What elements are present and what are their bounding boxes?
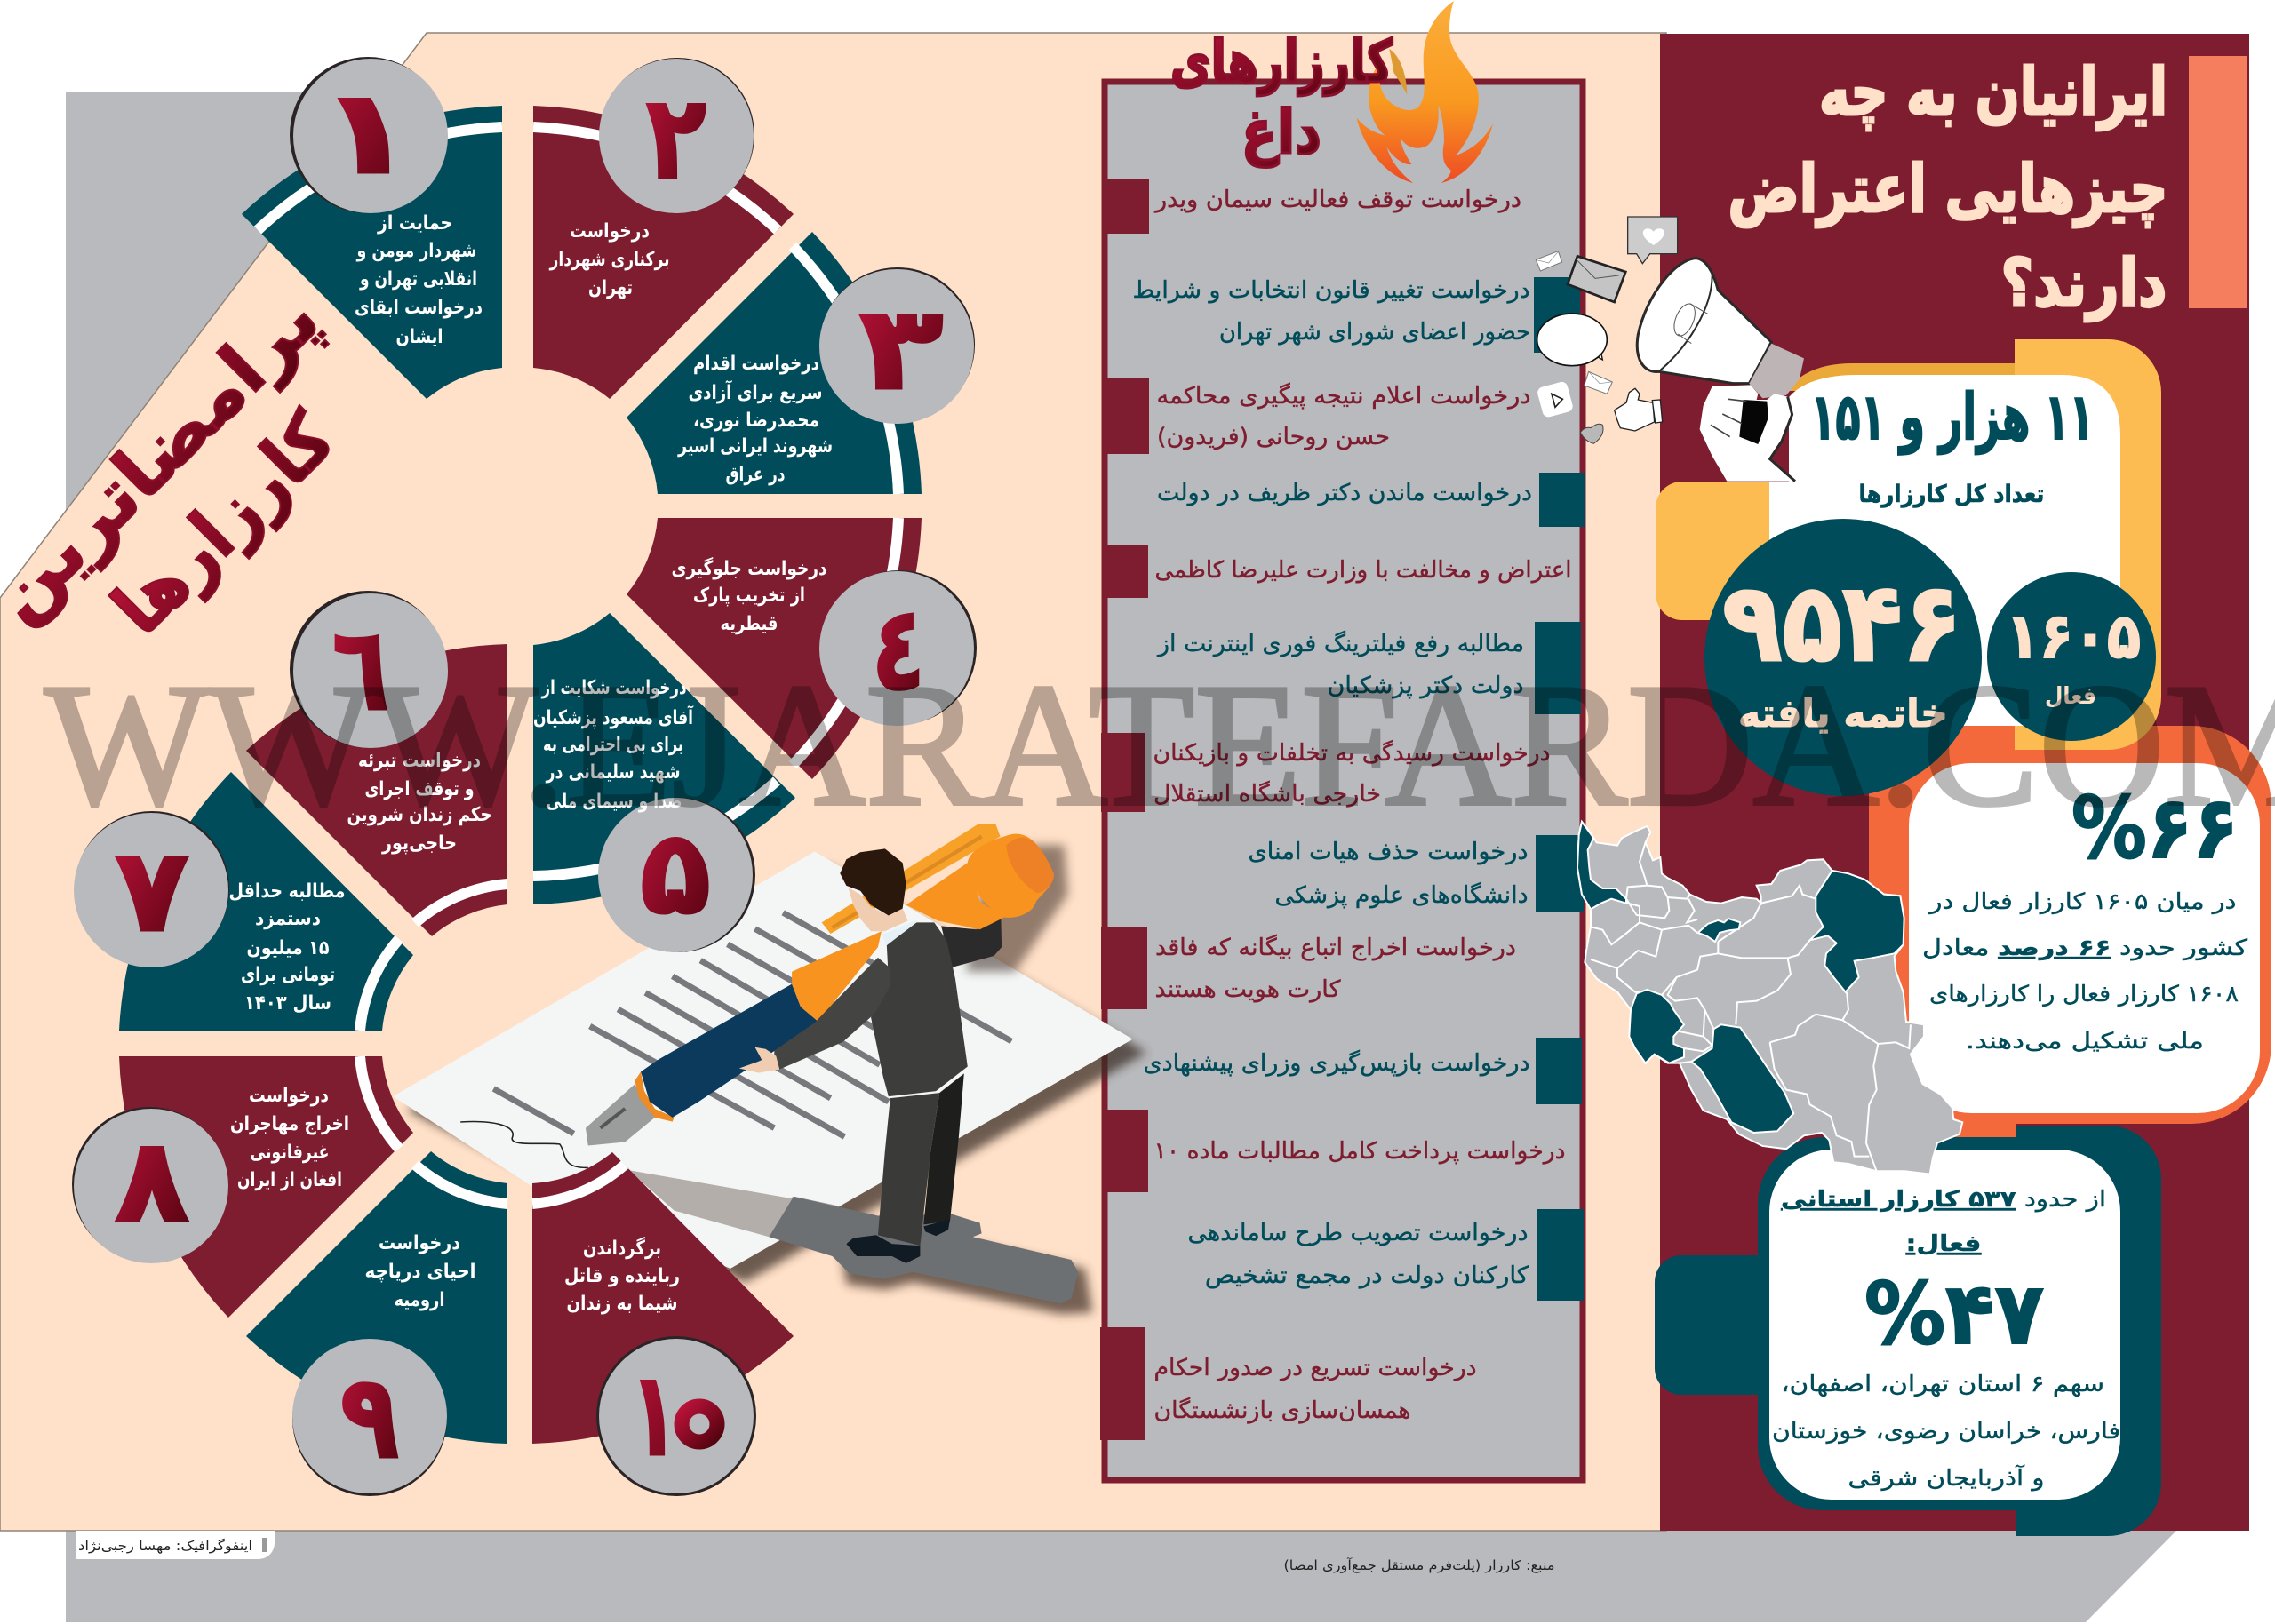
list item 9: درخواست اخراج اتباع بیگانه که فاقد bbox=[1155, 934, 1516, 961]
list item 11: درخواست پرداخت کامل مطالبات ماده ۱۰ bbox=[1153, 1138, 1566, 1165]
sector 9 bbox=[246, 1151, 507, 1444]
text 6 bbox=[347, 750, 492, 855]
list item 6 bbox=[1156, 622, 1581, 714]
badge 5 bbox=[598, 798, 755, 952]
text 4: قیطریه bbox=[720, 613, 778, 635]
text 10: برگرداندن bbox=[583, 1236, 661, 1260]
badge 7: ۷ bbox=[115, 823, 189, 958]
text 3: درخواست اقدام bbox=[693, 353, 819, 375]
icons: megaphone and social messages bbox=[1536, 217, 1804, 482]
list item 6: دولت دکتر پزشکیان bbox=[1328, 673, 1523, 699]
badge 9: ۹ bbox=[340, 1349, 399, 1485]
list item 12 bbox=[1187, 1209, 1584, 1301]
stat: total label: تعداد کل کارزارها bbox=[1859, 481, 2044, 508]
list item 10: درخواست بازپس‌گیری وزرای پیشنهادی bbox=[1143, 1049, 1530, 1077]
chart: upper campaigns wheel bbox=[242, 106, 922, 904]
icon: small heart bbox=[1580, 424, 1603, 443]
badge 2 bbox=[599, 58, 754, 213]
list item 9: کارت هویت هستند bbox=[1155, 976, 1341, 1003]
callout heading bbox=[1781, 1186, 2106, 1256]
badge 8 bbox=[72, 1107, 228, 1263]
list item 12: درخواست تصویب طرح ساماندهی bbox=[1187, 1220, 1529, 1246]
icon: thumbs up bbox=[1615, 388, 1663, 431]
text 8: اخراج مهاجران bbox=[230, 1113, 349, 1135]
panel: 66 percent block background bbox=[1869, 726, 2271, 1150]
text 2: برکناری شهردار bbox=[549, 249, 670, 271]
text 10: رباینده و قاتل bbox=[564, 1265, 680, 1287]
sector 10 bbox=[532, 1152, 794, 1444]
credit: designer label: اینفوگرافیک: مهسا رجبی‌نژاد bbox=[78, 1538, 252, 1554]
list item 2 bbox=[1132, 277, 1580, 353]
list item 11 bbox=[1102, 1110, 1566, 1192]
text 9: احیای دریاچه bbox=[364, 1261, 476, 1283]
badge 6: ٦ bbox=[332, 601, 389, 736]
text 1 bbox=[355, 212, 483, 348]
list item 5: اعتراض و مخالفت با وزارت علیرضا کاظمی bbox=[1155, 557, 1571, 584]
province: Khuzestan bbox=[1629, 990, 1684, 1063]
province: West Azerbaijan bbox=[1577, 822, 1626, 909]
text 3: سریع برای آزادی bbox=[688, 379, 823, 404]
callout text: در میان ۱۶۰۵ کارزار فعال در bbox=[1928, 888, 2236, 914]
text 4: از تخریب پارک bbox=[693, 585, 805, 607]
icon: play button bbox=[1537, 380, 1574, 418]
panel: hot campaigns list bbox=[1100, 82, 1585, 1480]
text 5: آقای مسعود پزشکیان bbox=[533, 705, 693, 729]
stat: active campaigns circle: فعال bbox=[2045, 683, 2096, 710]
sector 3 bbox=[627, 232, 922, 494]
number badges bbox=[72, 57, 977, 1496]
sector 6 bbox=[246, 644, 507, 936]
text 2 bbox=[549, 220, 670, 299]
sector 5 bbox=[533, 613, 795, 904]
badge 4: ٤ bbox=[872, 581, 925, 716]
stat: closed campaigns circle bbox=[1704, 519, 1982, 796]
chart: lower campaigns wheel bbox=[119, 644, 794, 1444]
text 8 bbox=[230, 1085, 349, 1191]
badge 2: ۲ bbox=[646, 70, 706, 205]
badge 10 bbox=[596, 1336, 756, 1496]
badge 10: ۱۰ bbox=[630, 1347, 726, 1482]
panel: dark red right column bbox=[1660, 34, 2249, 1531]
list item 12: کارکنان دولت در مجمع تشخیص bbox=[1205, 1262, 1529, 1289]
stat: active campaigns circle bbox=[1987, 572, 2156, 741]
sector 8 bbox=[119, 1056, 413, 1318]
list item 7 bbox=[1101, 733, 1550, 812]
icon: flame bbox=[1357, 1, 1493, 183]
sector 1 bbox=[242, 106, 502, 399]
text 9: درخواست bbox=[379, 1232, 460, 1254]
icon: small envelope bbox=[1536, 251, 1562, 271]
list item 4 bbox=[1157, 473, 1585, 527]
text 6: حاجی‌پور bbox=[381, 832, 457, 855]
badge 5: ۵ bbox=[640, 805, 711, 940]
callout text: فارس، خراسان رضوی، خوزستان bbox=[1772, 1418, 2120, 1444]
text 7: ۱۵ میلیون bbox=[247, 937, 329, 959]
text 5 bbox=[533, 677, 693, 813]
sector 2 bbox=[533, 106, 794, 399]
list item 13: درخواست تسریع در صدور احکام bbox=[1153, 1355, 1477, 1381]
sector 4 bbox=[627, 518, 922, 779]
text 8: درخواست bbox=[249, 1085, 329, 1107]
text 7: دستمزد bbox=[255, 908, 321, 930]
badge 9 bbox=[292, 1339, 447, 1496]
text 5: برای بی احترامی به bbox=[543, 734, 683, 756]
credit: source: منبع: کارزار (پلت‌فرم مستقل جمع‌آوری امضا) bbox=[1283, 1557, 1555, 1574]
list item 10 bbox=[1143, 1038, 1582, 1104]
text 6: درخواست تبرئه bbox=[358, 750, 481, 772]
panel: 47 percent callout bbox=[1655, 1126, 2161, 1536]
heading: hot campaigns: داغ bbox=[1241, 98, 1321, 168]
text 6: حکم زندان شروین bbox=[347, 804, 492, 826]
callout text: ملی تشکیل می‌دهند. bbox=[1966, 1028, 2204, 1054]
text 5: شهید سلیمانی در bbox=[546, 761, 681, 784]
badge 3: ۳ bbox=[858, 281, 944, 416]
callout text: سهم ۶ استان تهران، اصفهان، bbox=[1781, 1371, 2104, 1397]
list item 6: مطالبه رفع فیلترینگ فوری اینترنت از bbox=[1156, 630, 1524, 657]
illustration: man and giant pen bbox=[586, 824, 1078, 1303]
title bbox=[1728, 54, 2168, 322]
list item 2: حضور اعضای شورای شهر تهران bbox=[1219, 319, 1530, 346]
panel: 66 percent callout bbox=[1909, 763, 2260, 1113]
heading: most signed campaigns: کارزارها bbox=[97, 397, 351, 651]
list item 9 bbox=[1101, 927, 1516, 1009]
panel: title accent bbox=[2189, 56, 2247, 308]
text 5: درخواست شکایت از bbox=[541, 677, 686, 699]
callout heading: از حدود ۵۳۷ کارزار استانی bbox=[1781, 1186, 2106, 1213]
icon: speech bubble bbox=[1537, 314, 1607, 366]
stat: total number: ۱۱ هزار و ۱۵۱ bbox=[1811, 379, 2094, 455]
text 9 bbox=[364, 1232, 476, 1311]
list item 8: درخواست حذف هیات امنای bbox=[1248, 839, 1529, 865]
text 8: افغان از ایران bbox=[237, 1169, 342, 1191]
text 1: ایشان bbox=[396, 326, 443, 348]
text 4: درخواست جلوگیری bbox=[672, 556, 826, 580]
callout text: کشور حدود ۶۶ درصد معادل bbox=[1922, 935, 2247, 961]
sector 7 bbox=[119, 772, 413, 1031]
text 1: حمایت از bbox=[377, 212, 452, 235]
province: Tehran bbox=[1698, 919, 1740, 942]
text 1: درخواست ابقای bbox=[355, 297, 483, 319]
sector texts bbox=[229, 212, 833, 1315]
text 7: تومانی برای bbox=[241, 964, 335, 986]
icon: tiny envelope bbox=[1585, 371, 1612, 394]
province: Fars bbox=[1691, 1024, 1793, 1133]
list item 8 bbox=[1248, 835, 1584, 912]
text 1: شهردار مومن و bbox=[356, 240, 476, 262]
heading: hot campaigns bbox=[1170, 28, 1393, 168]
badge 1: ۱ bbox=[317, 65, 417, 200]
title: ایرانیان به چه bbox=[1819, 54, 2167, 131]
province: Razavi Khorasan bbox=[1810, 871, 1904, 992]
callout text: و آذربایجان شرقی bbox=[1848, 1464, 2044, 1492]
icon: megaphone bbox=[1637, 259, 1804, 398]
list item 13 bbox=[1100, 1327, 1477, 1440]
text 2: تهران bbox=[588, 277, 633, 299]
text 2: درخواست bbox=[570, 220, 650, 243]
list item 1 bbox=[1102, 179, 1521, 234]
text 3 bbox=[677, 353, 833, 486]
badge 1 bbox=[290, 57, 448, 213]
stat: closed campaigns circle: خاتمه یافته bbox=[1738, 691, 1948, 736]
list item 4: درخواست ماندن دکتر ظریف در دولت bbox=[1157, 480, 1532, 506]
text 7: سال ۱۴۰۳ bbox=[244, 992, 331, 1015]
heading: hot campaigns: کارزارهای bbox=[1170, 28, 1393, 96]
text 3: محمدرضا نوری، bbox=[693, 410, 819, 432]
list item 1: درخواست توقف فعالیت سیمان ویدر bbox=[1153, 187, 1521, 213]
callout text: ۱۶۰۸ کارزار فعال را کارزارهای bbox=[1929, 981, 2239, 1007]
text 7 bbox=[229, 880, 345, 1015]
list item 7: خارجی باشگاه استقلال bbox=[1153, 780, 1381, 808]
list item 2: درخواست تغییر قانون انتخابات و شرایط bbox=[1132, 277, 1530, 304]
background: peach panel bbox=[0, 33, 1666, 1531]
badge 6 bbox=[290, 591, 448, 748]
list item 8: دانشگاه‌های علوم پزشکی bbox=[1274, 881, 1529, 909]
text 3: شهروند ایرانی اسیر bbox=[677, 435, 833, 458]
callout text bbox=[1772, 1371, 2120, 1492]
icon: heart bubble bbox=[1628, 217, 1678, 264]
stat: 47 percent: %۴۷ bbox=[1864, 1264, 2044, 1364]
badge 3 bbox=[819, 267, 975, 424]
icon: large envelope bbox=[1568, 256, 1625, 302]
text 7: مطالبه حداقل bbox=[229, 880, 345, 903]
credit: designer label bbox=[76, 1531, 275, 1559]
stat: active campaigns circle: ۱۶۰۵ bbox=[2006, 600, 2141, 673]
stat: 66 percent: %۶۶ bbox=[2071, 778, 2239, 878]
text 10: شیما به زندان bbox=[567, 1293, 677, 1315]
stat: closed campaigns circle: ۹۵۴۶ bbox=[1722, 560, 1962, 686]
text 8: غیرقانونی bbox=[251, 1142, 329, 1164]
text 9: ارومیه bbox=[395, 1289, 444, 1311]
list item 5 bbox=[1102, 545, 1571, 598]
text 5: صدا و سیمای ملی bbox=[546, 791, 682, 813]
list item 3: حسن روحانی (فریدون) bbox=[1157, 424, 1390, 450]
text 10 bbox=[564, 1236, 680, 1315]
list item 3 bbox=[1106, 378, 1530, 454]
text 3: در عراق bbox=[725, 464, 786, 486]
badge 4 bbox=[819, 570, 977, 726]
watermark: WWW.EJARATEFARDA.COM bbox=[44, 648, 2275, 842]
list item 13: همسان‌سازی بازنشستگان bbox=[1153, 1397, 1411, 1424]
badge 7 bbox=[74, 811, 229, 967]
text 1: انقلابی تهران و bbox=[359, 268, 477, 291]
callout text bbox=[1922, 888, 2247, 1054]
badge 8: ۸ bbox=[115, 1113, 189, 1248]
panel: total campaigns block bbox=[1656, 339, 2161, 750]
text 6: و توقف اجرای bbox=[364, 778, 475, 800]
list item 3: درخواست اعلام نتیجه پیگیری محاکمه bbox=[1157, 382, 1530, 410]
map: Iran provinces bbox=[1577, 822, 1962, 1174]
list item 7: درخواست رسیدگی به تخلفات و بازیکنان bbox=[1153, 739, 1550, 767]
text 4 bbox=[672, 556, 826, 635]
illustration: paper with lines and shadow bbox=[393, 852, 1146, 1314]
title: دارند؟ bbox=[2001, 245, 2167, 322]
callout heading: فعال: bbox=[1905, 1230, 1982, 1256]
icon: hand bbox=[1700, 385, 1795, 482]
title: چیزهایی اعتراض bbox=[1728, 151, 2168, 227]
